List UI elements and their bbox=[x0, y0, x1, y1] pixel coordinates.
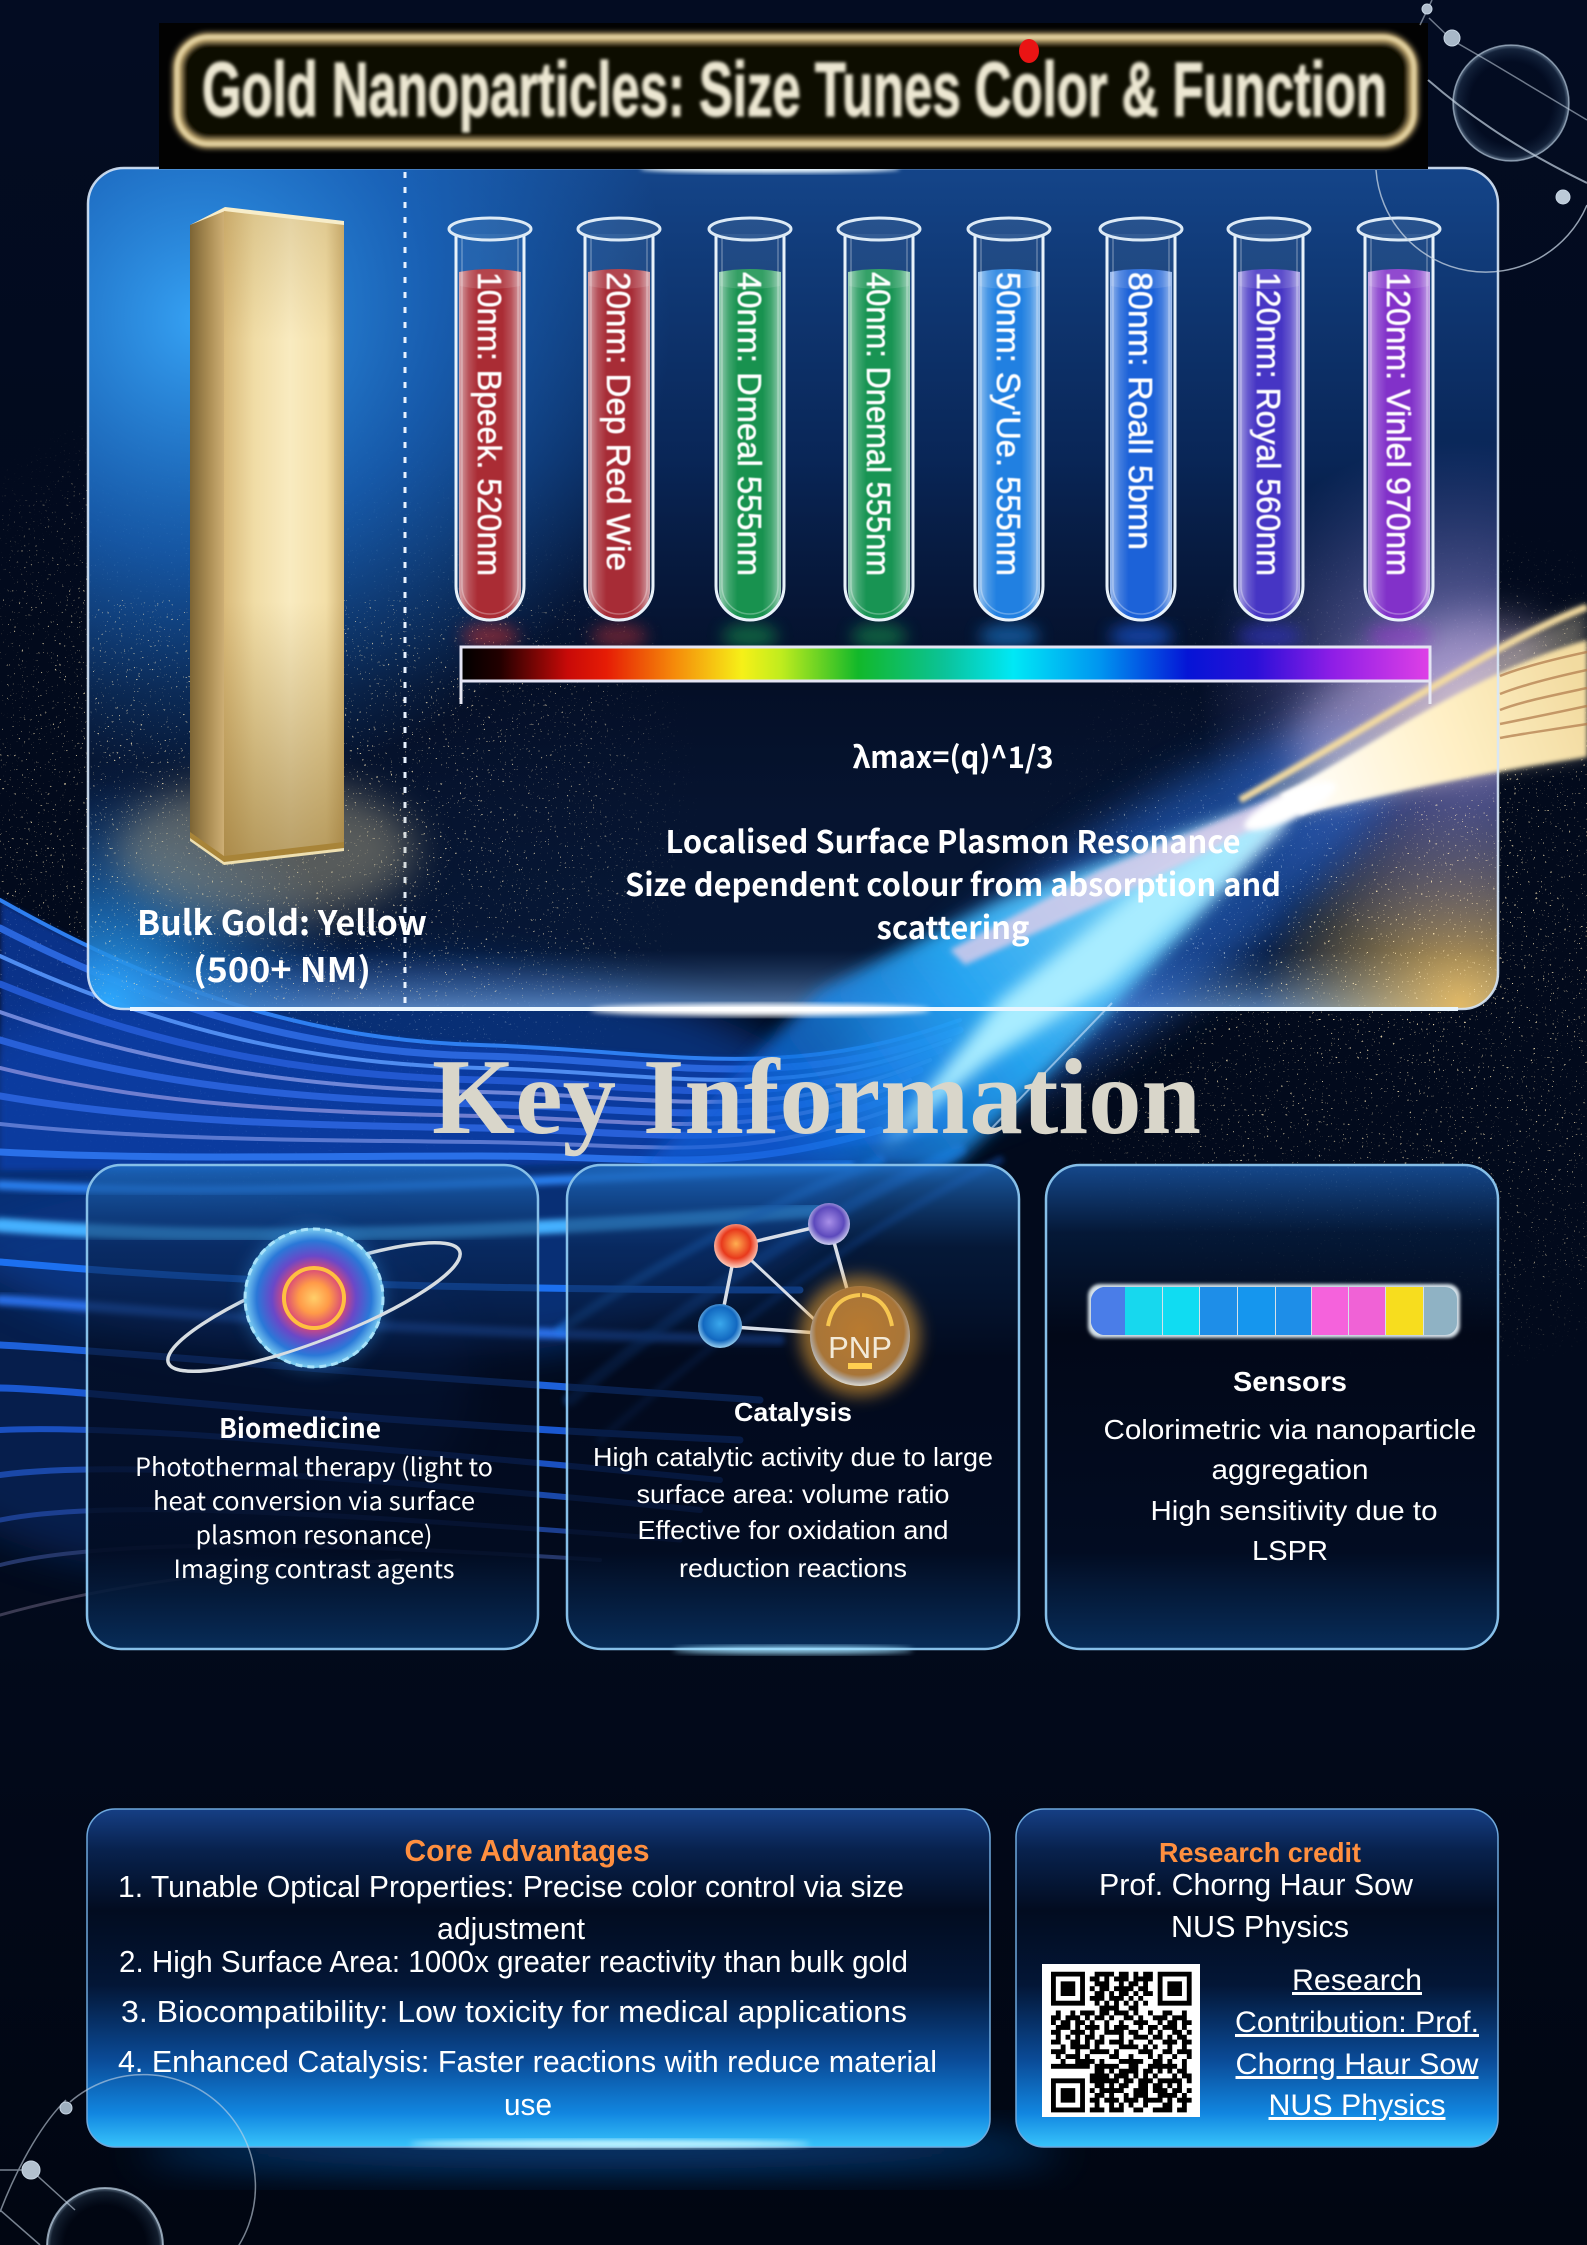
icon: catalytic network with PNP sphere bbox=[698, 1203, 920, 1396]
icon: catalytic network with PNP sphere: PNP bbox=[828, 1330, 892, 1365]
research contribution link text: Contribution: Prof. bbox=[1235, 2006, 1479, 2039]
test tube: 10nm red bbox=[449, 218, 531, 648]
label: bulk gold: Bulk Gold: Yellow bbox=[137, 896, 427, 945]
icon: colorimetric sensor strip bbox=[1088, 1284, 1460, 1338]
body: biomedicine: heat conversion via surface bbox=[153, 1482, 475, 1518]
body: catalysis: reduction reactions bbox=[679, 1553, 907, 1583]
list: advantages: use bbox=[504, 2087, 552, 2122]
list: advantages: 2. High Surface Area: 1000x greater reactivity than bulk gold bbox=[119, 1944, 908, 1979]
body: catalysis: surface area: volume ratio bbox=[636, 1479, 950, 1509]
card: catalysis bbox=[567, 1165, 1019, 1649]
list: advantages: 3. Biocompatibility: Low toxicity for medical applications bbox=[121, 1994, 907, 2029]
glow under catalysis card bbox=[673, 1646, 913, 1654]
background: starfield with blue waves bbox=[0, 426, 1587, 1616]
heading: catalysis: Catalysis bbox=[734, 1397, 852, 1427]
explanation text: Size dependent colour from absorption and bbox=[625, 860, 1281, 905]
body: biomedicine bbox=[135, 1448, 493, 1586]
label: bulk gold: (500+ NM) bbox=[193, 943, 371, 992]
body: sensors: LSPR bbox=[1252, 1535, 1328, 1566]
test tube: 40nm green second: 40nm: Dnemal 555nm bbox=[860, 272, 897, 576]
body: catalysis: Effective for oxidation and bbox=[638, 1515, 948, 1545]
panel: size to colour hero bbox=[88, 168, 1587, 1197]
panel: core advantages bbox=[87, 1809, 1060, 2170]
list: advantages: 4. Enhanced Catalysis: Faster reactions with reduce material bbox=[118, 2044, 937, 2079]
test tube: 40nm green: 40nm: Dmeal 555nm bbox=[731, 272, 768, 576]
heading: research credit: Research credit bbox=[1159, 1837, 1361, 1868]
heading: key information: Key Information bbox=[432, 1038, 1201, 1157]
test tube: 120nm royal indigo: 120nm: Royal 560nm bbox=[1250, 272, 1287, 576]
explanation text: scattering bbox=[876, 903, 1030, 948]
credit names bbox=[1099, 1867, 1414, 1944]
light beam: gold to blue bbox=[640, 586, 1587, 1197]
body: biomedicine: Photothermal therapy (light to bbox=[135, 1448, 493, 1484]
decoration: bottom-left orb network bbox=[0, 2075, 255, 2245]
QR code bbox=[1042, 1964, 1200, 2117]
title banner bbox=[159, 23, 1428, 173]
heading: biomedicine: Biomedicine bbox=[219, 1407, 381, 1446]
body: catalysis bbox=[593, 1442, 993, 1583]
spectrum bar with end ticks bbox=[461, 647, 1430, 704]
heading: core advantages: Core Advantages bbox=[404, 1833, 650, 1868]
test tube: 20nm deep red: 20nm: Dep Red Wie bbox=[600, 272, 637, 571]
test tube: 120nm violet bbox=[1358, 218, 1440, 648]
panel: research credit bbox=[1016, 1809, 1498, 2147]
test tube: 80nm royal blue bbox=[1100, 218, 1182, 648]
body: biomedicine: Imaging contrast agents bbox=[174, 1550, 454, 1586]
research contribution link text: Research bbox=[1292, 1964, 1422, 1997]
test tube: 40nm green bbox=[709, 218, 791, 648]
test tube: 50nm sky blue: 50nm: Sy'Ue. 555nm bbox=[990, 272, 1027, 576]
research contribution link text: Chorng Haur Sow bbox=[1236, 2048, 1479, 2081]
body: biomedicine: plasmon resonance) bbox=[196, 1516, 432, 1552]
card: sensors bbox=[1046, 1165, 1498, 1649]
formula: λmax=(q)^1/3 bbox=[852, 733, 1054, 777]
body: sensors: Colorimetric via nanoparticle bbox=[1104, 1414, 1476, 1445]
test tube: 40nm green second bbox=[838, 218, 920, 648]
explanation text: Localised Surface Plasmon Resonance bbox=[666, 817, 1240, 862]
list: advantages: adjustment bbox=[437, 1911, 585, 1946]
card: biomedicine bbox=[87, 1165, 538, 1649]
icon: nanoparticle cell with orbit bbox=[156, 1219, 472, 1395]
body: catalysis: High catalytic activity due to large bbox=[593, 1442, 993, 1472]
credit names: Prof. Chorng Haur Sow bbox=[1099, 1867, 1414, 1902]
divider: dashed vertical line bbox=[404, 172, 406, 1008]
test tube: 80nm royal blue: 80nm: RoalI 5bmn bbox=[1122, 272, 1159, 550]
body: sensors: High sensitivity due to bbox=[1150, 1495, 1438, 1526]
body: sensors bbox=[1104, 1414, 1476, 1566]
heading: sensors: Sensors bbox=[1233, 1366, 1347, 1397]
test tube: 120nm royal indigo bbox=[1228, 218, 1310, 648]
test tube: 20nm deep red bbox=[578, 218, 660, 648]
label: bulk gold bbox=[137, 896, 427, 992]
research contribution link text bbox=[1235, 1964, 1479, 2122]
icon: bulk gold bar bbox=[115, 207, 415, 920]
test tube: 120nm violet: 120nm: Vinlel 970nm bbox=[1380, 272, 1417, 576]
body: sensors: aggregation bbox=[1212, 1454, 1368, 1485]
list: advantages bbox=[118, 1869, 937, 2122]
decoration: top-right orb network bbox=[1376, 0, 1587, 272]
list: advantages: 1. Tunable Optical Properties: Precise color control via size bbox=[118, 1869, 904, 1904]
test tube: 10nm red: 10nm: Bpeek. 520nm bbox=[471, 272, 508, 576]
explanation text bbox=[625, 817, 1281, 948]
research contribution link text: NUS Physics bbox=[1268, 2089, 1446, 2122]
credit names: NUS Physics bbox=[1171, 1909, 1349, 1944]
test tube: 50nm sky blue bbox=[968, 218, 1050, 648]
